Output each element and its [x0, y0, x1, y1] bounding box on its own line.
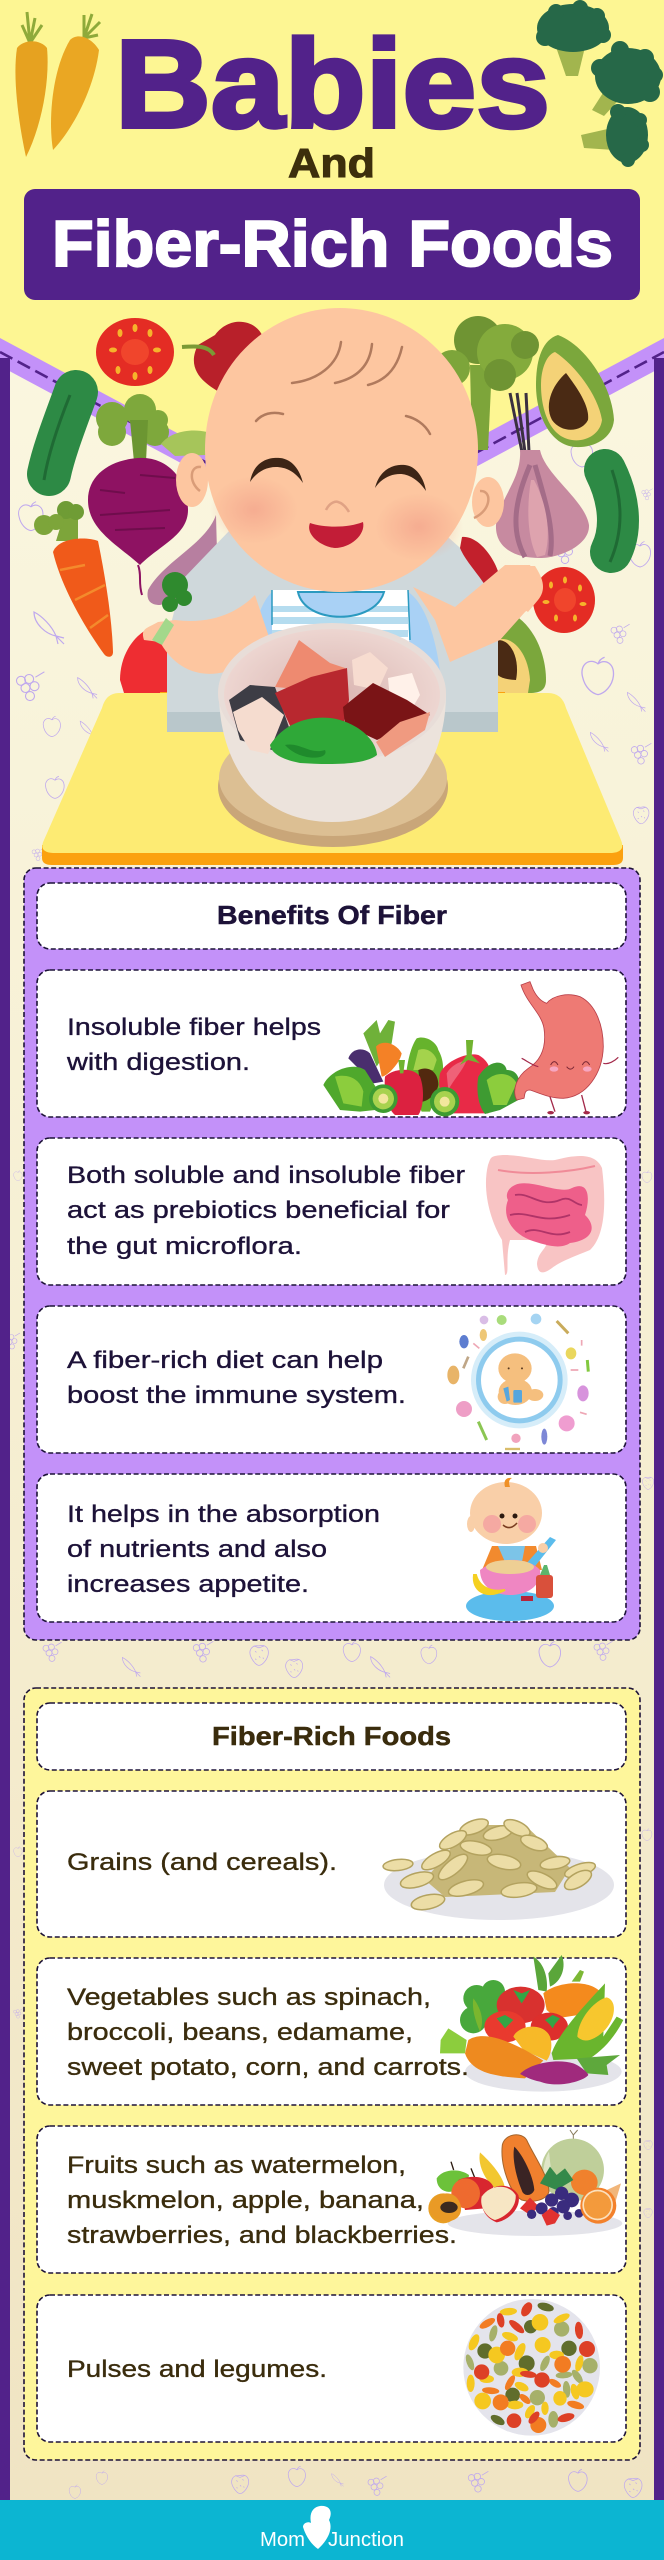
- cheeks: [210, 476, 298, 544]
- icon: vegetables and happy stomach: [323, 982, 618, 1116]
- card: fruits: [37, 2126, 626, 2273]
- panel: Benefits Of Fiber: [24, 868, 640, 1640]
- icon: pepper right: [460, 537, 502, 593]
- card: nutrient absorption: increases appetite.: [67, 1571, 309, 1598]
- card: vegetables: [37, 1955, 626, 2105]
- icon: fruit plate: [428, 2130, 622, 2236]
- logo: MomJunction: [260, 2506, 404, 2551]
- baby arms: [143, 565, 545, 680]
- icon: plate of pulses: [463, 2299, 600, 2436]
- baby head: [176, 308, 504, 592]
- text block: A fiber-rich diet can help: [67, 1347, 383, 1374]
- card: nutrient absorption: of nutrients and also: [67, 1536, 327, 1563]
- card: immune system: [37, 1306, 626, 1453]
- nose: [326, 502, 349, 512]
- text block: Grains (and cereals).: [67, 1849, 337, 1876]
- eyes: [250, 458, 426, 491]
- eyebrows: [256, 413, 430, 434]
- background: pale yellow header: [0, 0, 664, 560]
- icon: carrots: [15, 12, 100, 157]
- icon: apple behind hand: [120, 623, 167, 693]
- card: pulses: [37, 2295, 626, 2442]
- icon: vegetable plate: [440, 1955, 623, 2092]
- card: fruits: strawberries, and blackberries.: [67, 2222, 457, 2249]
- icon: tomato left: [96, 318, 174, 386]
- text block: Vegetables such as spinach,: [67, 1984, 431, 2011]
- card: prebiotics: the gut microflora.: [67, 1233, 302, 1260]
- chair: [167, 530, 498, 732]
- icon: garlic right: [496, 393, 589, 558]
- bowl food: [229, 685, 290, 750]
- card: vegetables: sweet potato, corn, and carrots.: [67, 2054, 469, 2081]
- icon: baby in protective ring with germs: [447, 1314, 589, 1449]
- icon: tomato in hand: [533, 567, 595, 633]
- baby hand fingers: [508, 566, 543, 612]
- text block: It helps in the absorption: [67, 1501, 380, 1528]
- card: prebiotics: act as prebiotics beneficial for: [67, 1197, 450, 1224]
- card: immune system: boost the immune system.: [67, 1382, 406, 1409]
- icon: cucumber right: [605, 470, 620, 562]
- text block: Pulses and legumes.: [67, 2356, 327, 2383]
- icon: lime wedge: [161, 430, 207, 456]
- chevron ribbon: [0, 338, 664, 550]
- card: digestion: with digestion.: [66, 1049, 250, 1076]
- hair strands: [292, 342, 402, 385]
- footer bar: [0, 2500, 664, 2560]
- card: fruits: muskmelon, apple, banana,: [67, 2187, 424, 2214]
- logo: MomJunction: Junction: [328, 2529, 404, 2551]
- panel: Fiber-Rich Foods: [24, 1688, 640, 2460]
- heading: Fiber-Rich Foods: Fiber-Rich Foods: [212, 1721, 451, 1751]
- icon: beetroot: [88, 458, 188, 595]
- icon: red pepper: [182, 322, 262, 395]
- logo: MomJunction: Mom: [260, 2529, 305, 2551]
- baby body and bib: [248, 590, 442, 690]
- card: grains: [37, 1791, 626, 1937]
- icon: avocado lower: [498, 612, 546, 693]
- icon: baby eating at tray: [466, 1478, 556, 1621]
- title: Babies: Babies: [115, 15, 550, 154]
- tray table: [42, 692, 623, 865]
- heading: Benefits Of Fiber: Benefits Of Fiber: [217, 900, 447, 930]
- title: And: And: [288, 140, 375, 186]
- hero illustration: baby with vegetables: [34, 308, 623, 865]
- title banner: Fiber-Rich Foods: Fiber-Rich Foods: [52, 207, 613, 280]
- heading: Benefits Of Fiber: [37, 883, 626, 949]
- icon: broccoli right: [434, 316, 539, 450]
- text block: Fruits such as watermelon,: [67, 2152, 406, 2179]
- icon: baby-held broccoli: [152, 572, 192, 645]
- icon: broccoli: [536, 0, 663, 167]
- icon: carrot: [34, 501, 113, 657]
- text block: Both soluble and insoluble fiber: [67, 1162, 465, 1189]
- card: nutrient absorption: [37, 1474, 626, 1622]
- heading: Fiber-Rich Foods: [37, 1703, 626, 1770]
- bowl on plate: [218, 623, 448, 847]
- icon: cucumber left: [44, 392, 76, 480]
- text block: Insoluble fiber helps: [67, 1014, 321, 1041]
- title banner: Fiber-Rich Foods: [24, 189, 640, 300]
- mouth: [309, 522, 363, 548]
- icon: oats on plate: [383, 1816, 614, 1920]
- icon: intestines: [486, 1155, 604, 1275]
- card: vegetables: broccoli, beans, edamame,: [67, 2019, 413, 2046]
- icon: garlic left: [148, 515, 218, 605]
- icon: avocado top: [536, 335, 614, 447]
- card: prebiotics: [37, 1138, 626, 1285]
- icon: beet leaves: [96, 394, 169, 462]
- card: digestion: [37, 970, 626, 1117]
